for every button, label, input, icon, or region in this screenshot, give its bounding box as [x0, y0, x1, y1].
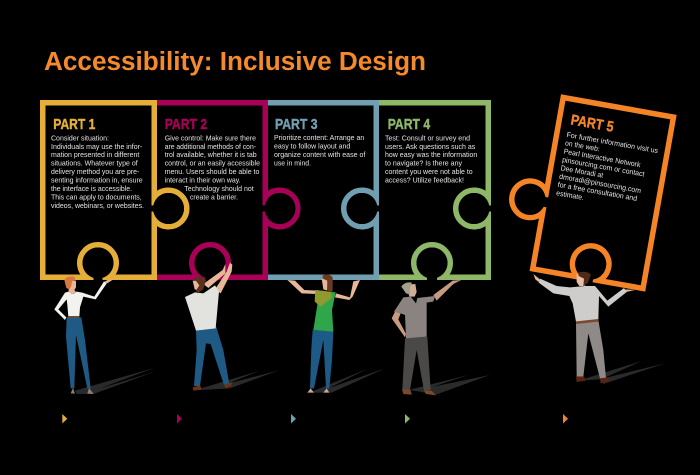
panel: part 4	[379, 103, 490, 278]
marker: part 3	[291, 414, 296, 424]
text: part 2 body: trol available, whether it is tab	[165, 150, 257, 159]
text: part 3 body: easy to follow layout and	[274, 142, 350, 150]
text: part 2 body: create a barrier.	[190, 192, 238, 202]
text: part 1 body: mation presented in different	[51, 150, 139, 159]
marker: part 5	[563, 414, 568, 424]
text: part 5 body: Pearl Interactive Network	[563, 147, 642, 169]
text: part 4 body: access? Utilize feedback!	[385, 176, 464, 185]
text: part 5 body: For further information visit us	[566, 130, 659, 155]
text: part 5 body: on the web:	[564, 138, 601, 153]
marker: part 4	[405, 414, 410, 424]
text: part 1 body: the interface is accessible.	[51, 184, 132, 193]
text: part 3 body: use in mind.	[274, 158, 311, 167]
text: part 4 body: how easy was the information	[385, 150, 477, 159]
figure: man in white t-shirt	[185, 263, 280, 391]
text: part 2 body	[165, 133, 260, 202]
text: part 3 body: Prioritize content: Arrange an	[274, 133, 364, 142]
text: part 1 body	[51, 133, 144, 210]
text: part 1 body: Consider situation:	[51, 133, 109, 142]
heading: part 3: PART 3	[275, 117, 318, 133]
text: part 2 body: menu. Users should be able to	[165, 167, 259, 176]
text: part 4 body: Test: Consult or survey end	[385, 133, 470, 142]
text: part 5 body	[556, 130, 659, 213]
title: Accessibility: Inclusive Design	[44, 48, 426, 76]
text: part 2 body: Technology should not	[184, 184, 254, 193]
panel: part 3	[268, 103, 378, 277]
text: part 5 body: Dee Moradi at	[560, 163, 604, 180]
text: part 2 body: control, or an easily accessible	[165, 159, 260, 168]
text: part 4 body: users. Ask questions such as	[385, 142, 476, 151]
text: part 2 body: interact in their own way.	[165, 176, 241, 185]
text: part 4 body: to navigate? Is there any	[385, 159, 462, 168]
heading: part 1: PART 1	[53, 117, 95, 133]
text: part 1 body: situations. Whatever type of	[51, 159, 139, 168]
text: part 3 body: organize content with ease of	[274, 150, 366, 159]
figure: man in grey sweater	[533, 272, 665, 384]
text: part 2 body: are additional methods of con-	[165, 142, 257, 151]
heading: part 2: PART 2	[165, 117, 207, 133]
panel: part 1	[43, 103, 187, 278]
text: part 2 body: Give control: Make sure there	[165, 133, 256, 142]
panel: part 5	[500, 92, 673, 289]
text: part 1 body: senting information in, ensure	[51, 176, 143, 185]
heading: part 4: PART 4	[388, 117, 431, 133]
heading: part 5: PART 5	[569, 112, 615, 136]
text: part 5 body: estimate.	[556, 188, 585, 202]
text: part 1 body: delivery method you are pre-	[51, 167, 140, 176]
text: part 5 body: pinsourcing.com or contact	[562, 155, 645, 179]
text: part 1 body: videos, webinars, or websites.	[51, 201, 144, 210]
marker: part 1	[62, 414, 67, 424]
text: part 5 body: for a free consultation and	[557, 180, 638, 203]
figure: man in grey shirt	[392, 280, 490, 395]
marker: part 2	[177, 414, 182, 424]
text: part 4 body: content you were not able to	[385, 167, 473, 176]
figure: woman in white top	[54, 276, 155, 394]
text: part 3 body	[274, 133, 366, 167]
text: part 4 body	[385, 133, 477, 185]
panel: part 2	[157, 103, 298, 278]
text: part 1 body: Individuals may use the infor-	[51, 142, 143, 151]
text: part 1 body: This can apply to documents,	[51, 192, 142, 202]
text: part 5 body: dmoradi@pinsourcing.com	[559, 172, 642, 195]
figure: woman in green top	[287, 274, 385, 393]
